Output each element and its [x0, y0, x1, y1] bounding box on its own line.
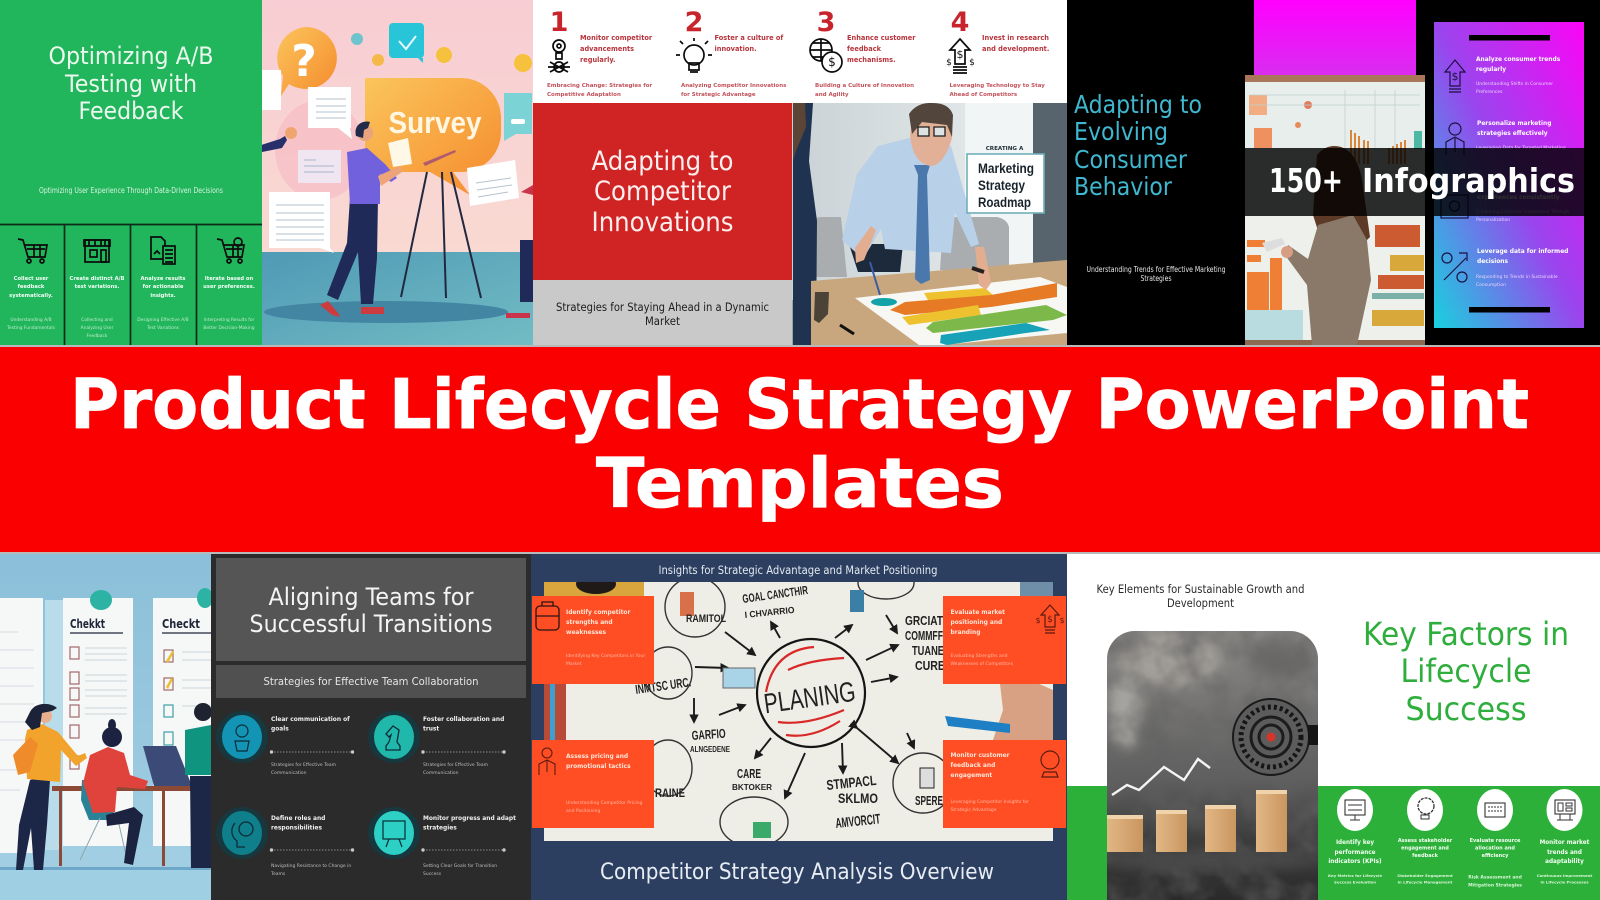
step sublabels: Designing Effective A/B — [137, 317, 189, 323]
sketch handwriting: SPERE — [915, 793, 943, 808]
icon: resource chart — [1477, 789, 1513, 831]
icon: dollar upward arrow — [946, 39, 975, 73]
step sublabels: Testing Fundamentals — [6, 325, 56, 331]
callout: evaluate market positioning: Evaluate market — [950, 610, 1005, 616]
panel: aligning teams slide — [211, 552, 531, 900]
step descriptions: innovation. — [714, 45, 757, 53]
banner: main title: Templates — [596, 444, 1004, 524]
factor sublabels: Success Evaluation — [1334, 880, 1376, 884]
icon: lightbulb and gear circle — [216, 711, 268, 763]
factor labels: Evaluate resource — [1470, 838, 1521, 844]
heading: Adapting to Evolving Consumer Behavior: Consumer — [1074, 145, 1188, 174]
list sublabels: Preferences — [1476, 89, 1503, 95]
callout: assess pricing: Understanding Competitor Pricing — [566, 800, 643, 806]
step labels: user preferences. — [203, 284, 255, 290]
subtitle: Market — [645, 314, 680, 328]
step labels: Collect user — [14, 276, 49, 282]
speech bubble: Survey: Survey — [388, 105, 482, 140]
step labels: Analyze results — [141, 276, 185, 282]
factor sublabels: Continuous Improvement — [1537, 873, 1592, 878]
icon: storefront — [84, 240, 110, 262]
step descriptions: Invest in research — [982, 34, 1049, 42]
sketch handwriting: AMVORCIT — [835, 810, 881, 831]
step sublabels: for Strategic Advantage — [681, 92, 756, 98]
icon: dollar upward arrow: $ — [969, 58, 975, 68]
subtitle: Insights for Strategic Advantage and Market Positioning — [658, 563, 938, 577]
heading: Adapting to Competitor Innovations: Adapting to — [592, 146, 734, 177]
step sublabels: Interpreting Results for — [204, 317, 255, 323]
item headings: Define roles and — [271, 816, 325, 822]
sketch handwriting: GARFIO — [691, 726, 726, 743]
heading: Optimizing A/B Testing with Feedback: Testing with — [64, 70, 197, 98]
step sublabels: Analyzing User — [81, 325, 114, 331]
callout: assess pricing: promotional tactics — [566, 764, 631, 770]
heading: Aligning Teams for Successful Transitions: Aligning Teams for — [268, 583, 474, 611]
panel: optimizing A/B testing slide — [0, 0, 262, 345]
step sublabels: Collecting and — [81, 317, 113, 323]
laptop — [143, 746, 192, 786]
item sublabels: Teams — [270, 871, 286, 877]
factor labels: feedback — [1412, 853, 1439, 859]
checklist pages: Chekkt — [70, 617, 105, 631]
factor labels: Monitor market — [1540, 840, 1590, 846]
list headings — [1476, 57, 1568, 265]
step sublabels: Better Decision-Making — [203, 325, 255, 331]
callout: identify competitor strengths: Market — [566, 661, 582, 667]
step labels: test variations. — [75, 284, 119, 290]
step numbers: 3 — [817, 7, 835, 38]
woman with phone — [13, 704, 87, 870]
step labels: Iterate based on — [205, 276, 253, 282]
callout: evaluate market positioning: Weaknesses of Competitors — [950, 661, 1014, 667]
panel: adapting to evolving consumer behavior slide — [1067, 0, 1600, 345]
banner: 150+ Infographics: 150+ — [1269, 161, 1343, 200]
sketch arrows and rings — [694, 615, 914, 798]
icon: document and calculator — [151, 237, 175, 264]
callout: monitor customer feedback: Strategic Advantage — [950, 807, 997, 813]
step sublabels — [6, 317, 255, 339]
central PLANING circle: PLANING — [762, 676, 857, 719]
checklist pages: Checkt — [162, 617, 200, 631]
man with clipboard — [320, 122, 456, 317]
heading: Adapting to Evolving Consumer Behavior: Behavior — [1074, 172, 1173, 201]
icon: target screen — [1441, 195, 1468, 218]
list headings: experiences consistently — [1477, 195, 1560, 201]
item sublabels: Success — [423, 871, 442, 877]
step descriptions: regularly. — [580, 56, 616, 64]
list headings: Analyze consumer trends — [1476, 57, 1561, 63]
callout: assess pricing: and Positioning — [566, 808, 601, 814]
icon: presentation board circle — [368, 807, 420, 859]
step descriptions: Foster a culture of — [714, 34, 783, 42]
photo: man with marketing strategy roadmap — [792, 103, 1067, 345]
item sublabels: Navigating Resistance to Change in — [271, 863, 351, 869]
sketch handwriting: STMPACL — [826, 772, 877, 793]
step labels: feedback — [18, 284, 45, 290]
man in green — [185, 703, 212, 868]
heading: Key Factors in Lifecycle Success: Lifecycle — [1400, 652, 1532, 690]
factor labels: engagement and — [1401, 846, 1449, 852]
list headings: decisions — [1477, 259, 1508, 265]
banner: 150+ Infographics: Infographics — [1362, 161, 1575, 200]
heading: Optimizing A/B Testing with Feedback — [48, 42, 214, 125]
list sublabels: Leveraging Data for Targeted Marketing — [1476, 145, 1566, 151]
step labels: Create distinct A/B — [70, 276, 125, 282]
factor labels: Identify key — [1336, 840, 1374, 846]
step sublabels: Leveraging Technology to Stay — [950, 83, 1045, 89]
callout: identify competitor strengths: Identifying Key Competitors in Your — [566, 653, 645, 659]
table — [52, 786, 201, 866]
factor labels: trends and — [1547, 850, 1582, 856]
sketch handwriting: CURE — [915, 658, 945, 673]
photo: woman at retail data wall — [1245, 75, 1425, 345]
subtitle — [556, 300, 769, 328]
heading: Adapting to Competitor Innovations: Innovations — [592, 207, 734, 238]
callout: monitor customer feedback: Leveraging Competitor Insights for — [950, 799, 1029, 805]
roadmap sign: Marketing — [978, 161, 1034, 176]
roadmap sign: Strategy — [978, 178, 1025, 193]
woman — [1313, 146, 1370, 245]
icon: globe and dollar — [810, 39, 842, 72]
callout: identify competitor strengths: Identify competitor — [566, 610, 630, 616]
step descriptions: and development. — [982, 45, 1049, 53]
factor labels — [1328, 838, 1590, 865]
subtitle — [1086, 265, 1226, 283]
roadmap sign — [967, 146, 1044, 213]
sketch handwriting: RAINE — [655, 786, 685, 800]
subtitle: Key Elements for Sustainable Growth and — [1096, 582, 1304, 596]
icon: dollar upward arrow: $ — [956, 48, 964, 61]
list headings: Personalize marketing — [1477, 121, 1551, 127]
step sublabels: Ahead of Competitors — [950, 92, 1018, 98]
callout: evaluate market positioning: $ — [1059, 616, 1065, 625]
sketch handwriting: GRCIAT — [905, 613, 943, 628]
subtitle: Strategies for Effective Team Collaboration — [264, 675, 479, 688]
item headings: Clear communication of — [271, 717, 350, 723]
step labels: insights. — [150, 293, 176, 299]
factor sublabels: in Lifecycle Management — [1398, 880, 1452, 884]
factor labels: allocation and — [1475, 846, 1515, 852]
subtitle: Strategies — [1140, 274, 1172, 283]
heading: Aligning Teams for Successful Transitions — [250, 583, 492, 638]
item sublabels: Strategies for Effective Team — [271, 762, 336, 768]
factor labels: efficiency — [1482, 853, 1509, 859]
step descriptions: feedback — [847, 45, 882, 53]
banner: 150+ Infographics — [1245, 148, 1584, 216]
step sublabels: Competitive Adaptation — [547, 92, 621, 98]
icon: chess knight circle — [368, 711, 420, 763]
step sublabels — [547, 83, 1045, 98]
callout: evaluate market positioning: $ — [1047, 615, 1053, 625]
icon: light bulb — [676, 38, 712, 72]
panel: checklist team illustration — [0, 552, 213, 900]
subtitle: Development — [1167, 596, 1234, 610]
list headings: Leverage data for informed — [1477, 249, 1568, 255]
item sublabels: Communication — [271, 770, 307, 776]
callout: monitor customer feedback — [943, 740, 1066, 828]
subtitle: Optimizing User Experience Through Data-Driven Decisions — [39, 186, 223, 195]
panel: competitor strategy analysis slide — [531, 552, 1067, 900]
step descriptions — [580, 34, 1049, 64]
step descriptions: Monitor competitor — [580, 34, 653, 42]
step descriptions: advancements — [580, 45, 634, 53]
heading: Adapting to Evolving Consumer Behavior: Adapting to — [1074, 90, 1202, 119]
roadmap sign: CREATING A — [986, 146, 1024, 152]
banner: main title: Product Lifecycle Strategy PowerPoint — [70, 365, 1529, 445]
factor labels: Assess stakeholder — [1398, 838, 1453, 844]
icon: dollar arrow: $ — [1452, 70, 1458, 83]
list headings: strategies effectively — [1477, 131, 1548, 137]
item headings: Foster collaboration and — [423, 717, 504, 723]
list sublabels: Personalization — [1476, 217, 1510, 223]
step labels: for actionable — [143, 284, 184, 290]
item sublabels: Strategies for Effective Team — [423, 762, 488, 768]
step numbers — [550, 7, 969, 38]
sketch handwriting: INMTSC URC. — [634, 674, 692, 697]
banner: main title — [0, 345, 1600, 554]
factor labels: performance — [1335, 850, 1376, 856]
icon: shopping cart — [18, 239, 47, 263]
callout: monitor customer feedback: Monitor customer — [950, 753, 1010, 759]
icon: question bubble: ? — [291, 36, 317, 87]
item headings — [271, 717, 516, 832]
callout: evaluate market positioning — [943, 596, 1066, 684]
photo: planning mind map sketch — [544, 567, 1053, 847]
icon: KPI monitor — [1337, 789, 1373, 831]
list sublabels: Understanding Shifts in Consumer — [1476, 81, 1553, 87]
step numbers: 2 — [685, 7, 703, 38]
item sublabels: Setting Clear Goals for Transition — [423, 863, 497, 869]
heading: Adapting to Evolving Consumer Behavior: Evolving — [1074, 117, 1168, 146]
sketch handwriting: BKTOKER — [732, 783, 772, 792]
callout: identify competitor strengths — [532, 596, 654, 684]
item sublabels — [270, 762, 497, 877]
callout: evaluate market positioning: branding — [950, 630, 980, 636]
panel: adapting to competitor innovations slide — [533, 0, 1067, 345]
icon: dollar upward arrow: $ — [946, 58, 952, 68]
icon: dollar arrow — [1445, 60, 1465, 92]
factor sublabels: Key Metrics for Lifecycle — [1328, 873, 1382, 878]
callout: monitor customer feedback: engagement — [950, 773, 992, 779]
sketch handwriting: RAMITOL — [686, 613, 726, 625]
factor sublabels: in Lifecycle Processes — [1540, 880, 1589, 884]
subtitle: Understanding Trends for Effective Marketing — [1086, 265, 1226, 274]
list sublabels — [1476, 81, 1570, 288]
icon: market dashboard — [1546, 789, 1582, 831]
heading: Optimizing A/B Testing with Feedback: Optimizing A/B — [48, 42, 214, 70]
step sublabels: and Agility — [815, 92, 849, 98]
item headings: Monitor progress and adapt — [423, 816, 516, 822]
icon: teal heart card — [389, 23, 424, 63]
heading: Key Factors in Lifecycle Success: Key Factors in — [1363, 615, 1569, 653]
callout: evaluate market positioning: positioning and — [950, 620, 1002, 626]
sketch handwriting — [634, 583, 945, 831]
note cards — [262, 70, 532, 253]
icon: cart with check — [217, 238, 244, 263]
list sublabels: Responding to Trends in Sustainable — [1476, 274, 1558, 280]
sketch handwriting: TUANE — [912, 643, 944, 658]
list sublabels: Consumption — [1476, 282, 1506, 288]
step numbers: 4 — [951, 7, 969, 38]
step numbers: 1 — [550, 7, 568, 38]
heading: Adapting to Competitor Innovations: Competitor — [594, 176, 732, 207]
subtitle — [1096, 582, 1304, 610]
heading: Competitor Strategy Analysis Overview: Competitor Strategy Analysis Overview — [600, 860, 994, 885]
step sublabels: Understanding A/B — [10, 317, 52, 323]
step labels: systematically. — [9, 293, 53, 299]
icon: globe and dollar: $ — [828, 55, 836, 69]
item headings: goals — [271, 726, 289, 732]
heading: Key Factors in Lifecycle Success — [1363, 615, 1569, 728]
step descriptions: Enhance customer — [847, 34, 916, 42]
callout: assess pricing: Assess pricing and — [566, 754, 628, 760]
central PLANING circle — [757, 639, 865, 747]
step labels — [9, 276, 255, 299]
panel: key factors in lifecycle success slide — [1067, 552, 1600, 900]
callout: identify competitor strengths: strengths and — [566, 620, 613, 626]
step sublabels: Embracing Change: Strategies for — [547, 83, 652, 89]
factor sublabels: Stakeholder Engagement — [1397, 873, 1453, 878]
step descriptions: mechanisms. — [847, 56, 896, 64]
factor sublabels — [1328, 873, 1592, 888]
icon: growth arrow with coins — [1442, 253, 1467, 282]
factor labels: indicators (KPIs) — [1328, 859, 1382, 865]
checklist pages — [0, 588, 213, 853]
man — [849, 244, 903, 272]
item headings: strategies — [423, 826, 457, 832]
step sublabels: Analyzing Competitor Innovations — [681, 83, 787, 89]
heading: Key Factors in Lifecycle Success: Success — [1406, 690, 1526, 728]
factor sublabels: Risk Assessment and — [1468, 874, 1522, 880]
sketch handwriting: GOAL CANCTHIR — [741, 583, 809, 606]
list headings: regularly — [1476, 67, 1506, 73]
item headings: responsibilities — [271, 826, 322, 832]
table and plan — [811, 260, 1067, 345]
sketch handwriting: COMMFF — [905, 628, 943, 643]
icon: gear bulb — [1407, 789, 1443, 831]
seated woman and chair — [80, 719, 148, 865]
heading: Adapting to Evolving Consumer Behavior — [1074, 90, 1202, 201]
sketch handwriting: CARE — [737, 766, 761, 781]
item sublabels: Communication — [423, 770, 459, 776]
callout: evaluate market positioning: $ — [1035, 616, 1041, 625]
factor labels: adaptability — [1545, 859, 1584, 865]
easel — [401, 172, 481, 298]
roadmap sign: Roadmap — [978, 195, 1031, 210]
sketch handwriting: ALNGEDENE — [690, 745, 731, 754]
list sublabels: Enhancing Customer Experience Through — [1476, 209, 1570, 215]
icon: target robot — [548, 40, 570, 72]
step sublabels: Feedback — [87, 333, 108, 339]
callout: assess pricing — [532, 740, 654, 828]
gradient card: consumer strategies — [1434, 22, 1584, 328]
subtitle: Strategies for Staying Ahead in a Dynamic — [556, 300, 769, 314]
factor sublabels: Mitigation Strategies — [1468, 882, 1522, 888]
icon: businessperson — [1446, 123, 1464, 155]
step sublabels: Test Variations — [146, 325, 180, 331]
sketch handwriting: I CHVARRIO — [744, 605, 795, 620]
speech bubble: Survey — [365, 78, 501, 195]
icon: question bubble — [277, 27, 337, 96]
item headings: trust — [423, 726, 439, 732]
heading: Adapting to Competitor Innovations — [592, 146, 734, 238]
step sublabels: Building a Culture of Innovation — [815, 83, 914, 89]
callout: evaluate market positioning: Evaluating Strengths and — [950, 653, 1008, 659]
icon: gear bulb circle — [216, 807, 268, 859]
heading: Optimizing A/B Testing with Feedback: Feedback — [78, 97, 184, 125]
callout: identify competitor strengths: weaknesses — [566, 630, 607, 636]
callout: monitor customer feedback: feedback and — [950, 763, 995, 769]
sketch handwriting: SKLMO — [838, 790, 878, 806]
panel: survey illustration — [258, 0, 533, 345]
heading: Aligning Teams for Successful Transitions: Successful Transitions — [250, 610, 492, 638]
photo: wooden blocks and target dial — [1095, 631, 1325, 900]
